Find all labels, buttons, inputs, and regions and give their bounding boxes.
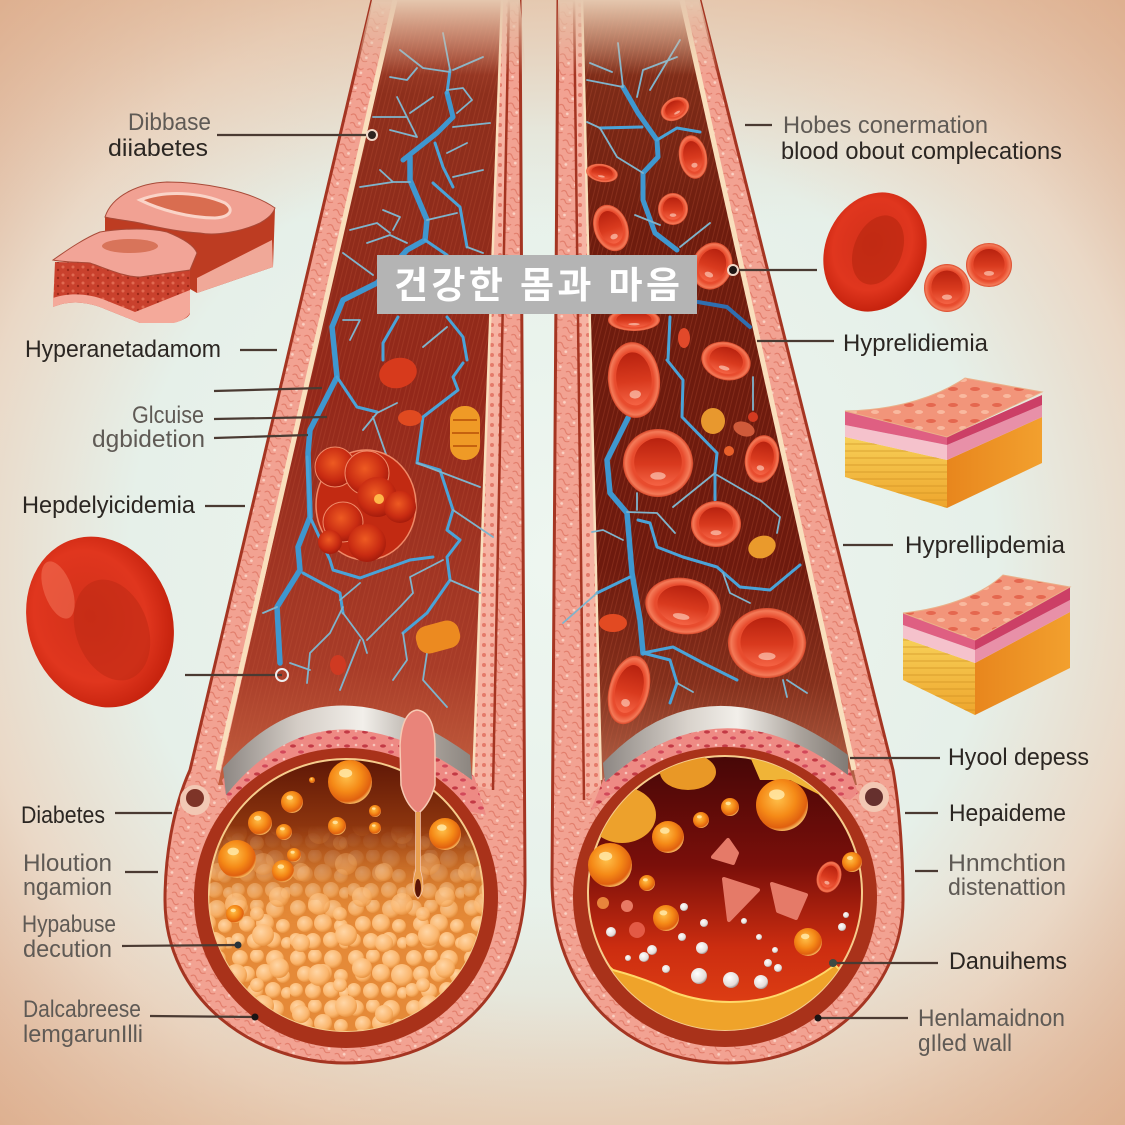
left silver band	[223, 706, 472, 795]
left artery: diabetes vessel	[165, 0, 525, 1063]
left labels: Dibbase	[128, 109, 211, 136]
right labels: Hyool depess	[948, 744, 1089, 771]
left labels: Hyperanetadamom	[25, 336, 221, 363]
right labels: Hepaideme	[949, 800, 1066, 827]
right labels: Henlamaidnon	[918, 1005, 1065, 1032]
right labels: Hnmchtion	[948, 850, 1066, 877]
left vessel ring	[180, 785, 210, 815]
icon: tissue block lower	[903, 575, 1070, 715]
right vessel ring	[859, 782, 889, 812]
left labels	[21, 109, 221, 1048]
right blood cells	[585, 92, 806, 729]
right veins	[563, 40, 807, 703]
left labels: Hypabuse	[22, 911, 116, 938]
left labels: decution	[23, 936, 112, 963]
left drip	[400, 710, 435, 898]
left pink band	[222, 720, 486, 815]
left lumen	[218, 0, 509, 790]
right silver band	[603, 706, 848, 782]
left labels: diiabetes	[108, 135, 208, 162]
right white particles	[606, 903, 849, 989]
right pink fragments	[713, 840, 806, 920]
left labels: lemgarunIlli	[23, 1021, 143, 1048]
back slice	[105, 182, 275, 293]
icon: red blood cells right	[806, 177, 1012, 327]
right labels	[781, 112, 1089, 1057]
right vessel wall	[552, 0, 903, 1063]
right labels: blood obout complecations	[781, 138, 1062, 165]
left labels: Hloution	[23, 850, 112, 877]
right labels: Danuihems	[949, 948, 1067, 975]
left bubbles	[218, 760, 461, 923]
right labels: gIled wall	[918, 1030, 1012, 1057]
title banner: 건강한 몸과 마음	[394, 265, 680, 306]
leader lines	[115, 125, 940, 1022]
left lumen cross-section	[205, 759, 490, 1035]
title banner	[377, 255, 697, 314]
icon: artery slices	[53, 182, 275, 323]
left clot	[315, 447, 416, 562]
right labels: Hyprelidiemia	[843, 330, 989, 357]
right plaque deposits	[600, 758, 840, 1030]
right labels: Hobes conermation	[783, 112, 988, 139]
left veins	[263, 33, 493, 707]
right pink band	[590, 717, 858, 812]
right labels: distenattion	[948, 874, 1066, 901]
left vessel wall	[165, 0, 525, 1063]
right artery: hyperlipidemia vessel	[552, 0, 903, 1063]
left labels: Dalcabreese	[23, 996, 141, 1023]
left labels: dgbidetion	[92, 426, 205, 453]
icon: large red blood cell	[3, 516, 197, 728]
left labels: Glcuise	[132, 402, 204, 429]
top fade over vessels	[356, 0, 718, 70]
right labels: Hyprellipdemia	[905, 532, 1066, 559]
left outer ring	[194, 748, 498, 1048]
right lumen cross-section	[588, 756, 862, 1030]
right lumen	[574, 0, 857, 800]
left labels: Diabetes	[21, 802, 105, 829]
right bubbles	[588, 779, 862, 956]
right outer ring	[573, 747, 877, 1047]
left small particles	[330, 354, 480, 675]
left labels: ngamion	[23, 874, 112, 901]
front slice	[53, 229, 197, 323]
left labels: Hepdelyicidemia	[22, 492, 196, 519]
icon: tissue block upper	[845, 378, 1042, 508]
